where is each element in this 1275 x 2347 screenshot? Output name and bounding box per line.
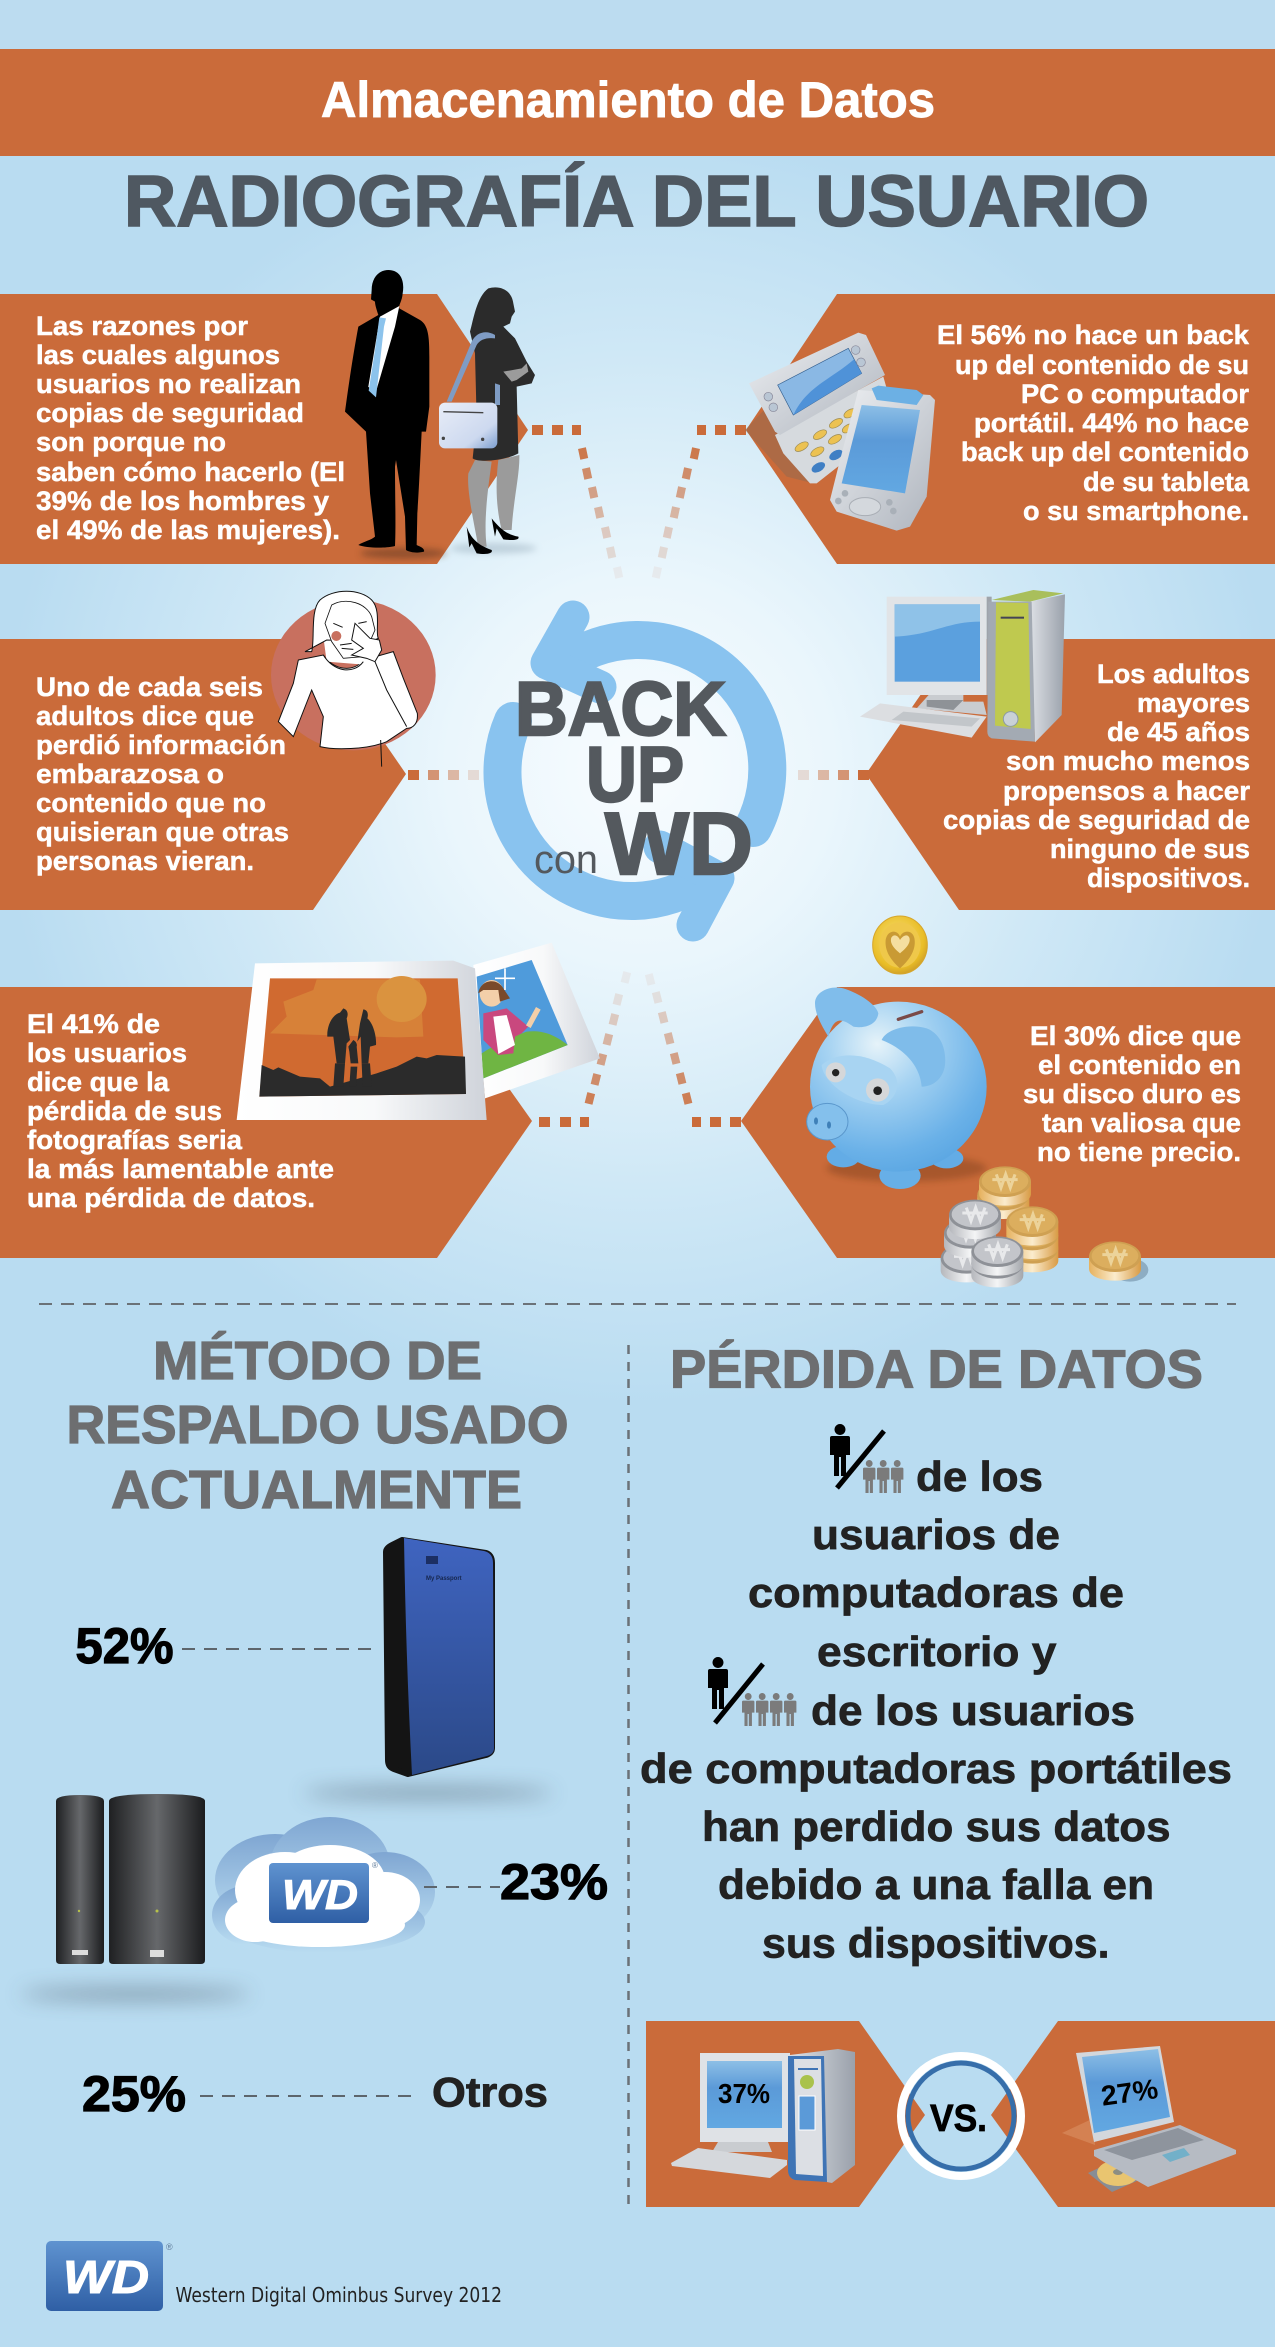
panel text: uno de cada seis: adultos dice que	[36, 701, 254, 731]
icon: network drives	[20, 1794, 250, 2000]
label: vs: VS.	[930, 2098, 987, 2140]
panel text: adultos mayores: dispositivos.	[1087, 863, 1250, 893]
icon: laptop 27%	[1062, 2046, 1236, 2192]
panel text: 56 percent	[937, 320, 1249, 526]
icon: desktop computer	[860, 590, 1065, 742]
heading: método de respaldo	[66, 1331, 568, 1520]
panel text: uno de cada seis: embarazosa o	[36, 759, 224, 789]
icon: portable hard drive	[303, 1538, 553, 1799]
center logo: Back Up con WD	[502, 617, 767, 925]
text block: data loss statement: de computadoras portátiles	[640, 1745, 1232, 1792]
title: Almacenamiento de Datos	[321, 72, 935, 128]
icon: piggy bank and coins	[807, 916, 1148, 1287]
heading: método de respaldo: MÉTODO DE	[153, 1331, 482, 1391]
text block: data loss statement: debido a una falla en	[718, 1861, 1154, 1908]
text block: data loss statement: escritorio y	[817, 1628, 1057, 1675]
label: 37%: 37%	[718, 2078, 770, 2109]
icon: portable hard drive: My Passport	[426, 1576, 462, 1582]
center logo: Back Up con WD: BACK	[515, 667, 726, 752]
icon: photo album	[237, 943, 600, 1120]
icon: embarrassed woman	[271, 591, 436, 767]
panel text: adultos mayores: mayores	[1137, 688, 1250, 718]
heading: método de respaldo: RESPALDO USADO	[66, 1395, 568, 1455]
label: 25% Otros: 25%	[82, 2066, 186, 2122]
panel text: 56 percent: up del contenido de su	[955, 350, 1249, 380]
panel text: razones: las cuales algunos	[36, 340, 280, 370]
heading: pérdida de datos: PÉRDIDA DE DATOS	[670, 1340, 1203, 1400]
text block: data loss statement: computadoras de	[748, 1569, 1124, 1616]
panel text: 41 percent: la más lamentable ante	[27, 1154, 334, 1184]
text block: data loss statement	[640, 1453, 1232, 1966]
icon: heart coin	[873, 916, 927, 974]
center logo: Back Up con WD: UP	[586, 730, 684, 818]
panel text: 30 percent: El 30% dice que	[1030, 1021, 1241, 1051]
label: 25% Otros: Otros	[432, 2068, 548, 2116]
panel text: razones: el 49% de las mujeres).	[36, 515, 340, 545]
icon: desktop 37%	[671, 2049, 855, 2183]
panel text: adultos mayores: propensos a hacer	[1003, 776, 1250, 806]
panel text: 41 percent: dice que la	[27, 1067, 169, 1097]
panel text: 30 percent: el contenido en	[1038, 1050, 1241, 1080]
panel: desktop versus laptop shapes	[646, 2021, 1275, 2207]
heading: método de respaldo: ACTUALMENTE	[111, 1460, 522, 1520]
panel text: 56 percent: back up del contenido	[961, 437, 1249, 467]
panel text: 41 percent: fotografías seria	[27, 1125, 242, 1155]
icon: WD cloud	[212, 1817, 435, 1953]
panel text: razones: copias de seguridad	[36, 398, 304, 428]
panel text: uno de cada seis	[36, 672, 289, 876]
panel text: adultos mayores: de 45 años	[1107, 717, 1250, 747]
icon: WD cloud: ®	[372, 1861, 378, 1870]
logo: WD footer: WD	[63, 2251, 149, 2303]
title banner	[0, 49, 1275, 156]
text block: data loss statement: de los usuarios	[811, 1687, 1135, 1734]
text block: data loss statement: usuarios de	[812, 1511, 1060, 1558]
panel text: 30 percent	[1023, 1021, 1241, 1167]
panel text: razones: 39% de los hombres y	[36, 486, 329, 516]
label: 23%: 23%	[500, 1854, 608, 1910]
panel text: 56 percent: portátil. 44% no hace	[974, 408, 1249, 438]
section dividers	[39, 1304, 1236, 2209]
panel text: razones: Las razones por	[36, 311, 248, 341]
panel text: 30 percent: no tiene precio.	[1037, 1137, 1241, 1167]
panel text: 41 percent: los usuarios	[27, 1038, 187, 1068]
panel text: 56 percent: PC o computador	[1021, 379, 1249, 409]
panel text: 30 percent: tan valiosa que	[1042, 1108, 1241, 1138]
main heading: RADIOGRAFÍA DEL USUARIO	[124, 162, 1149, 242]
panel text: adultos mayores: ninguno de sus	[1050, 834, 1250, 864]
panel text: razones: son porque no	[36, 427, 226, 457]
panel text: razones: usuarios no realizan	[36, 369, 301, 399]
panel text: adultos mayores: copias de seguridad de	[943, 805, 1250, 835]
panel: orange shapes	[0, 294, 1275, 1258]
panel text: 56 percent: o su smartphone.	[1023, 496, 1249, 526]
panel text: 41 percent: El 41% de	[27, 1009, 160, 1039]
label: 52%: 52%	[76, 1618, 174, 1674]
icon: one of five fraction	[708, 1657, 796, 1726]
icon: versus badge	[901, 2056, 1021, 2176]
source note: Western Digital Ominbus Survey 2012	[176, 2283, 502, 2307]
panel text: uno de cada seis: Uno de cada seis	[36, 672, 263, 702]
panel text: adultos mayores: Los adultos	[1097, 659, 1250, 689]
panel text: uno de cada seis: contenido que no	[36, 788, 266, 818]
panel text: 30 percent: su disco duro es	[1023, 1079, 1241, 1109]
panel text: adultos mayores	[943, 659, 1250, 893]
logo: WD footer	[46, 2241, 173, 2311]
label: 25% Otros	[82, 2066, 548, 2122]
panel text: adultos mayores: son mucho menos	[1006, 746, 1250, 776]
center logo: Back Up con WD: con	[534, 838, 598, 882]
dotted connectors	[408, 425, 869, 1127]
text block: data loss statement: han perdido sus datos	[702, 1803, 1170, 1850]
panel text: uno de cada seis: personas vieran.	[36, 846, 254, 876]
panel text: 56 percent: El 56% no hace un back	[937, 320, 1249, 350]
panel text: 56 percent: de su tableta	[1083, 467, 1249, 497]
panel text: 41 percent: pérdida de sus	[27, 1096, 222, 1126]
panel text: 41 percent: una pérdida de datos.	[27, 1183, 315, 1213]
panel text: uno de cada seis: perdió información	[36, 730, 286, 760]
logo: WD footer: ®	[166, 2242, 173, 2252]
panel text: 41 percent	[27, 1009, 334, 1213]
text block: data loss statement: de los	[916, 1453, 1043, 1500]
icon: one of four fraction	[830, 1424, 903, 1493]
panel text: razones: saben cómo hacerlo (El	[36, 457, 345, 487]
center logo: Back Up con WD: WD	[605, 794, 753, 893]
panel text: uno de cada seis: quisieran que otras	[36, 817, 289, 847]
text block: data loss statement: sus dispositivos.	[762, 1920, 1110, 1966]
label: 27%: 27%	[1099, 2073, 1160, 2112]
icon: handheld devices	[745, 333, 935, 531]
icon: WD cloud: WD	[282, 1871, 358, 1918]
panel text: razones	[36, 311, 345, 545]
icon: businessman and businesswoman	[345, 270, 537, 559]
